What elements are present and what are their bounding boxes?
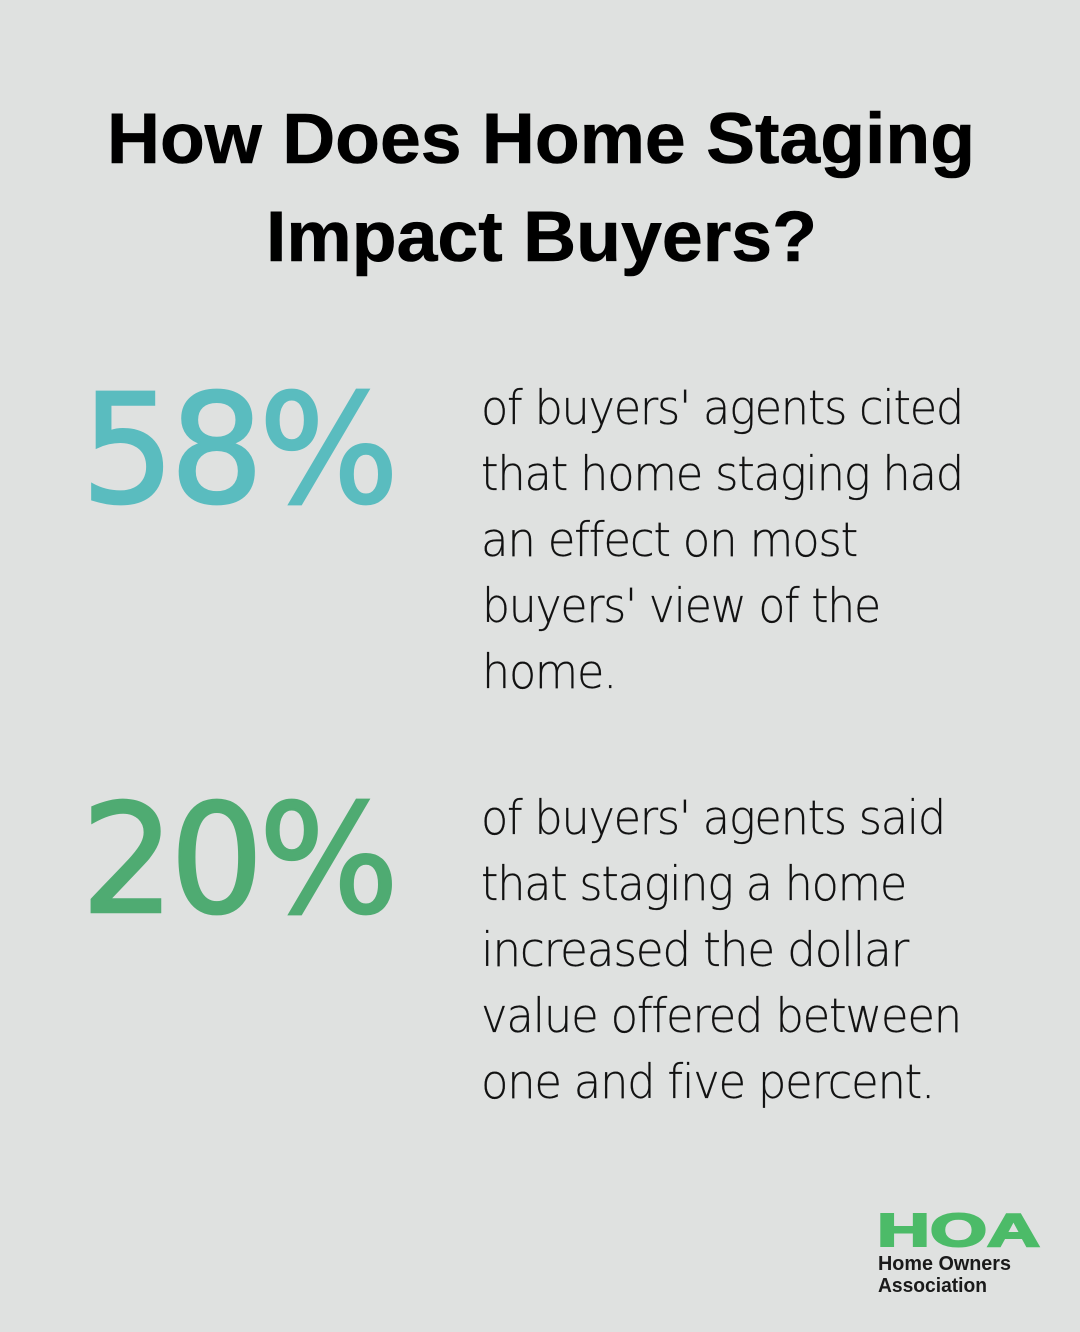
logo: Home Owners Association [877, 1204, 1040, 1297]
text block: 58% description [481, 381, 963, 700]
text block: 20% description: value offered between [481, 989, 961, 1044]
stat: 58%: 58% [81, 362, 394, 538]
text block: 58% description: home. [482, 645, 616, 700]
text block: 20% description: of buyers' agents said [481, 791, 945, 846]
stat: 20%: 20% [81, 772, 394, 948]
text block: 58% description: that home staging had [481, 447, 963, 502]
text block: 20% description [481, 791, 961, 1110]
text block: 58% description: of buyers' agents cited [481, 381, 963, 436]
logo: Home Owners Association: HOA [877, 1204, 1040, 1256]
text block: 20% description: one and five percent. [481, 1055, 934, 1110]
text block: 58% description: an effect on most [481, 513, 857, 568]
text block: 20% description: that staging a home [481, 857, 906, 912]
text block: 20% description: increased the dollar [481, 923, 910, 978]
title: Impact Buyers? [266, 198, 817, 277]
title [107, 100, 975, 277]
title: How Does Home Staging [107, 100, 975, 179]
text block: 58% description: buyers' view of the [482, 579, 880, 634]
logo: Home Owners Association: Home Owners [878, 1253, 1011, 1275]
logo: Home Owners Association: Association [878, 1275, 987, 1297]
